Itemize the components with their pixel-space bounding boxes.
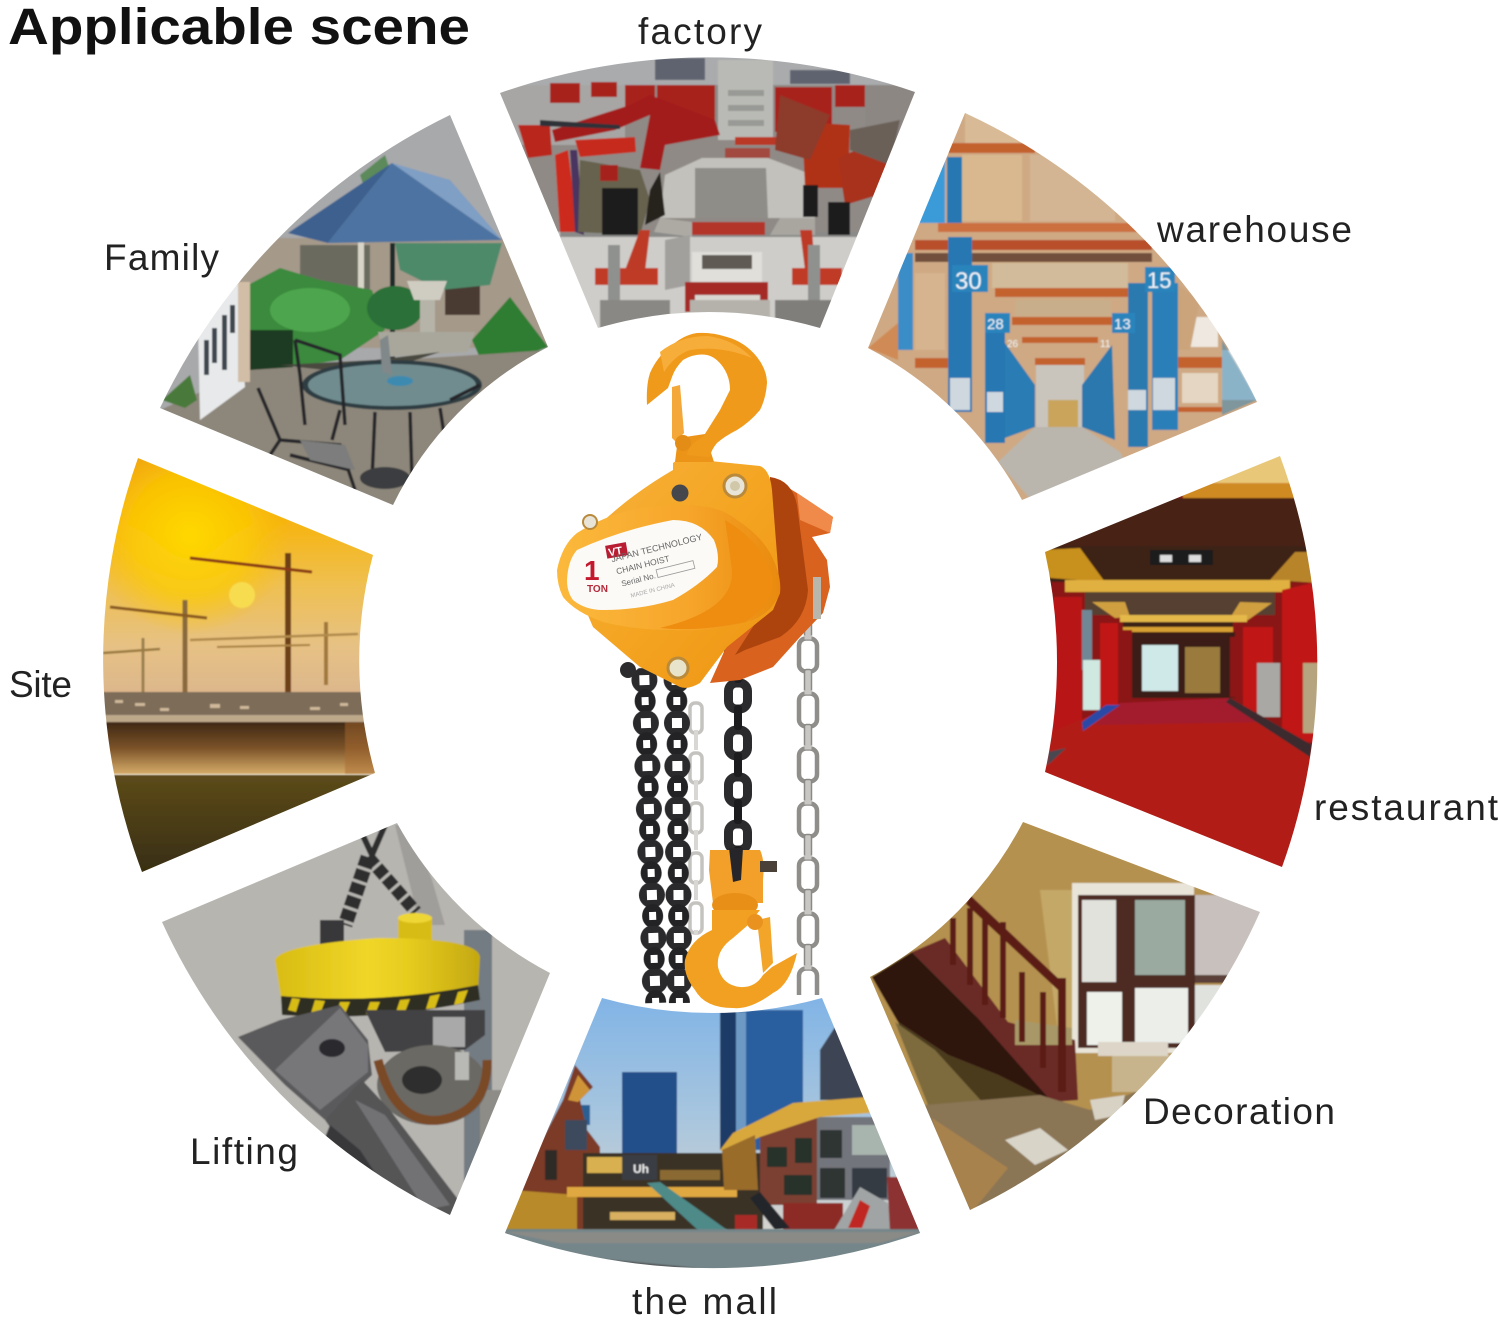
pale back chain (688, 700, 704, 935)
front shell (557, 505, 780, 630)
silver hand chain (795, 610, 821, 995)
rack numbers: 28 (987, 316, 1004, 333)
ceiling (1212, 456, 1290, 484)
carpet (1045, 714, 1311, 867)
tower cranes (103, 552, 358, 693)
white label (567, 520, 718, 610)
front plate (575, 458, 780, 688)
lower hook (685, 848, 797, 1008)
stacked boxes (962, 155, 1022, 221)
VT badge (605, 542, 628, 559)
black load chain right (722, 645, 754, 855)
rack numbers: 26 (1007, 339, 1019, 350)
staircase (872, 952, 1052, 1102)
rack numbers: 11 (1100, 339, 1111, 350)
panel: factory (495, 50, 920, 337)
sign: Uh (633, 1162, 649, 1176)
label text (610, 532, 713, 602)
plaza (505, 1228, 920, 1268)
panel: decoration (860, 815, 1265, 1220)
chain hoist (557, 333, 833, 1008)
panel: the mall (500, 985, 925, 1274)
left building (522, 1064, 601, 1230)
door (162, 282, 250, 420)
parasol (288, 163, 502, 375)
paving (160, 350, 548, 510)
towers (736, 1009, 804, 1151)
fountain (378, 281, 475, 357)
lifting magnet (275, 913, 480, 1017)
ceiling sign (1150, 550, 1213, 565)
label: Family: Family (104, 237, 220, 278)
black load chain middle (663, 668, 692, 1003)
label: warehouse: warehouse (1156, 209, 1352, 250)
floor (998, 426, 1124, 498)
car body (660, 158, 815, 218)
right roof and buildings (760, 1115, 817, 1205)
label plates (950, 378, 1175, 412)
bolts (583, 475, 746, 678)
VT badge: VT (607, 545, 624, 559)
back room (1036, 365, 1084, 428)
panel: site (103, 458, 375, 872)
label text: MADE IN CHINA (630, 583, 676, 600)
lower wall and floor (895, 1022, 985, 1110)
panel: restaurant (1040, 450, 1325, 880)
label text: CHAIN HOIST (615, 553, 671, 576)
rack numbers: 15 (1147, 268, 1171, 293)
glass table (302, 335, 482, 410)
label: the mall: the mall (632, 1281, 777, 1322)
rack numbers (952, 265, 1175, 350)
rack numbers: 30 (955, 268, 982, 295)
label: Site: Site (9, 664, 72, 705)
label text: JAPAN TECHNOLOGY (610, 532, 703, 564)
hall end (1130, 632, 1235, 698)
label: restaurant: restaurant (1314, 787, 1499, 828)
capacity mark: 1 (584, 555, 600, 586)
rack numbers: 13 (1114, 316, 1131, 333)
robot arms right (802, 122, 850, 188)
robot arms left (518, 125, 552, 158)
panel: family (155, 110, 560, 510)
garden wall (240, 238, 560, 348)
ground (100, 722, 390, 774)
label: Lifting: Lifting (190, 1131, 298, 1172)
brake drum (377, 1045, 487, 1125)
panel: warehouse (860, 105, 1265, 510)
central mall (583, 1153, 763, 1233)
label text: Serial No. (620, 571, 657, 588)
building silhouette (104, 691, 363, 716)
red pillars and statues (1052, 596, 1083, 732)
sign (622, 1155, 657, 1180)
window (1078, 895, 1195, 1048)
plants (246, 268, 385, 370)
capacity mark: TON (587, 584, 608, 595)
label: factory: factory (638, 11, 762, 52)
label: Decoration: Decoration (1143, 1091, 1335, 1132)
blue uprights (898, 150, 1257, 447)
chairs and legs (258, 340, 480, 490)
capacity mark (584, 555, 608, 595)
lower fixtures (595, 268, 658, 285)
lifting chain (345, 825, 416, 925)
rear housing (710, 477, 833, 683)
scrap casting (238, 1005, 372, 1120)
panel: lifting (155, 820, 560, 1225)
top hook (647, 333, 767, 462)
orange beams (915, 143, 1222, 412)
black load chain left (631, 668, 669, 1003)
tent (833, 1187, 892, 1232)
